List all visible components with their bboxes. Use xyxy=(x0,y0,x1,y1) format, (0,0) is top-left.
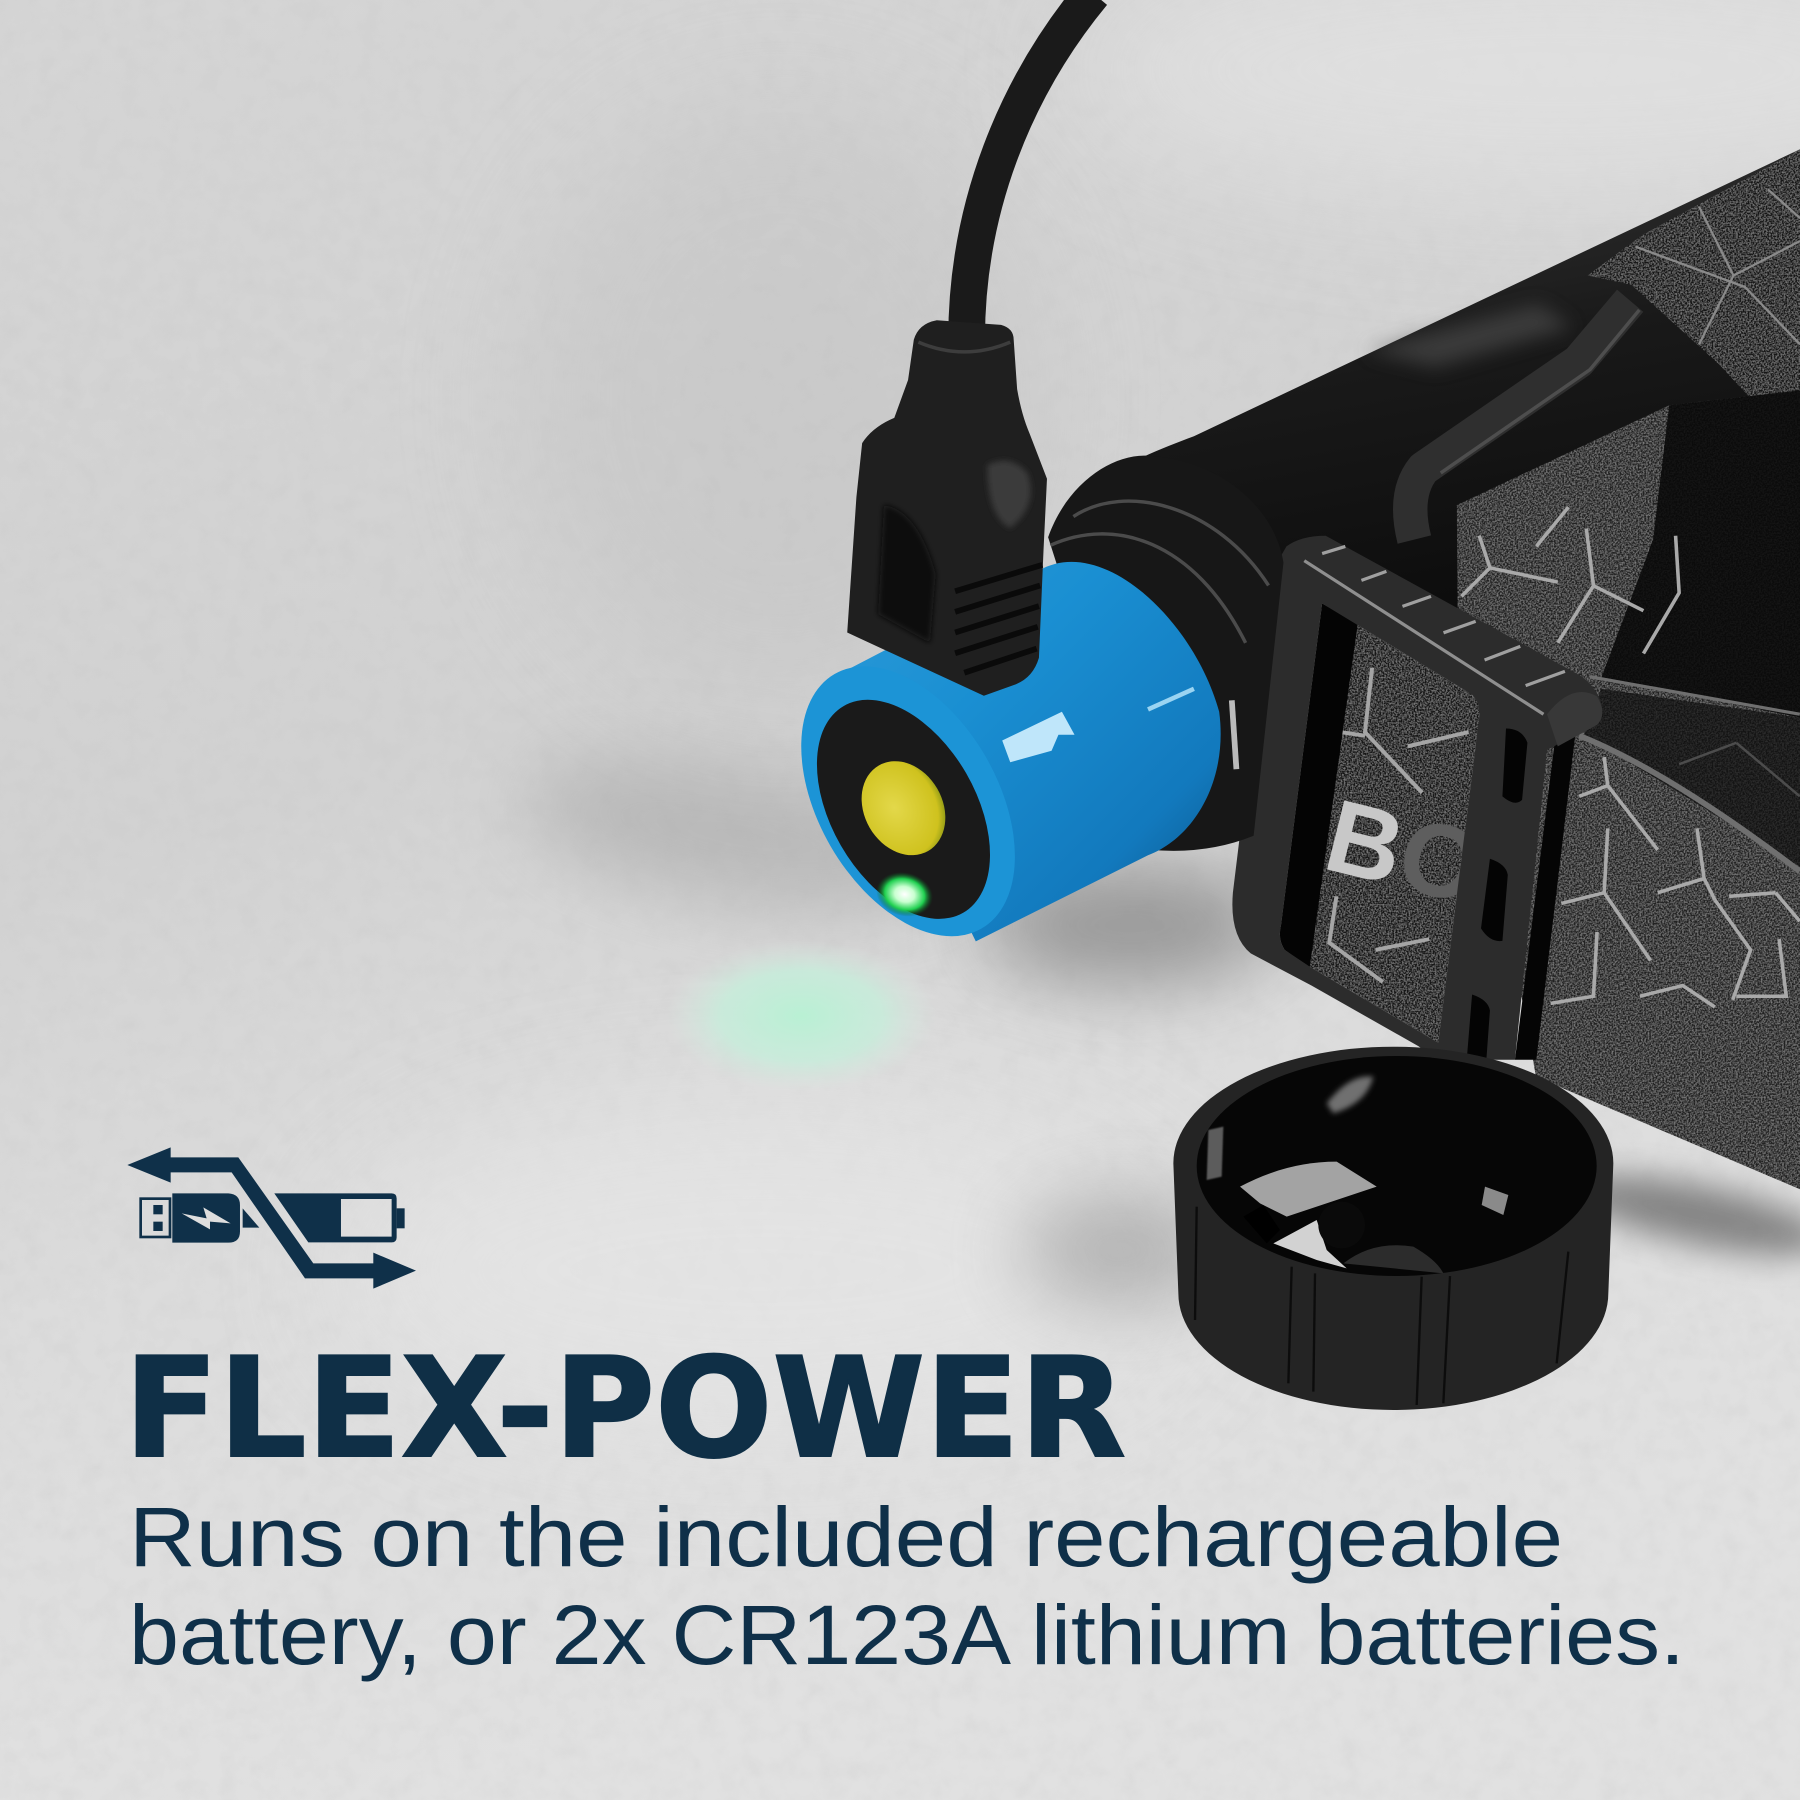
upper head strap xyxy=(1588,149,1800,451)
icon: USB plug xyxy=(141,1193,259,1243)
battery contact xyxy=(845,746,962,870)
strap web pattern, strap in buckle, logo and buckle xyxy=(1232,507,1800,1060)
title: FLEX-POWER xyxy=(124,1328,1126,1489)
strap web lines xyxy=(1461,507,1800,1007)
icon: battery xyxy=(274,1193,405,1242)
description text: battery, or 2x CR123A lithium batteries. xyxy=(129,1588,1685,1682)
main strap xyxy=(1457,390,1800,1189)
icon: double arrow xyxy=(127,1147,416,1289)
charge indicator LED xyxy=(871,866,938,922)
cap ribs xyxy=(1195,1207,1568,1405)
description text xyxy=(129,1490,1685,1682)
photo: headlamp, battery and cable xyxy=(666,0,1800,1410)
sealing rings xyxy=(1048,456,1283,851)
strap bracket xyxy=(1410,301,1639,540)
green light spot on surface xyxy=(666,940,937,1092)
strap logo: BO xyxy=(1315,777,1494,927)
buckle xyxy=(1232,536,1602,1060)
battery xyxy=(757,562,1236,973)
battery cap xyxy=(1173,1047,1613,1410)
battery end face xyxy=(757,629,1059,973)
body highlight xyxy=(1366,304,1573,367)
headlamp body xyxy=(1068,149,1800,620)
USB cable xyxy=(967,0,1093,339)
description text: Runs on the included rechargeable xyxy=(129,1490,1563,1584)
strap seen through buckle xyxy=(1280,604,1480,1043)
cap interior highlights xyxy=(1207,1076,1508,1273)
icon: USB and battery flex power xyxy=(127,1147,416,1289)
USB connector xyxy=(847,320,1047,696)
strap edge cords xyxy=(1579,677,1800,871)
